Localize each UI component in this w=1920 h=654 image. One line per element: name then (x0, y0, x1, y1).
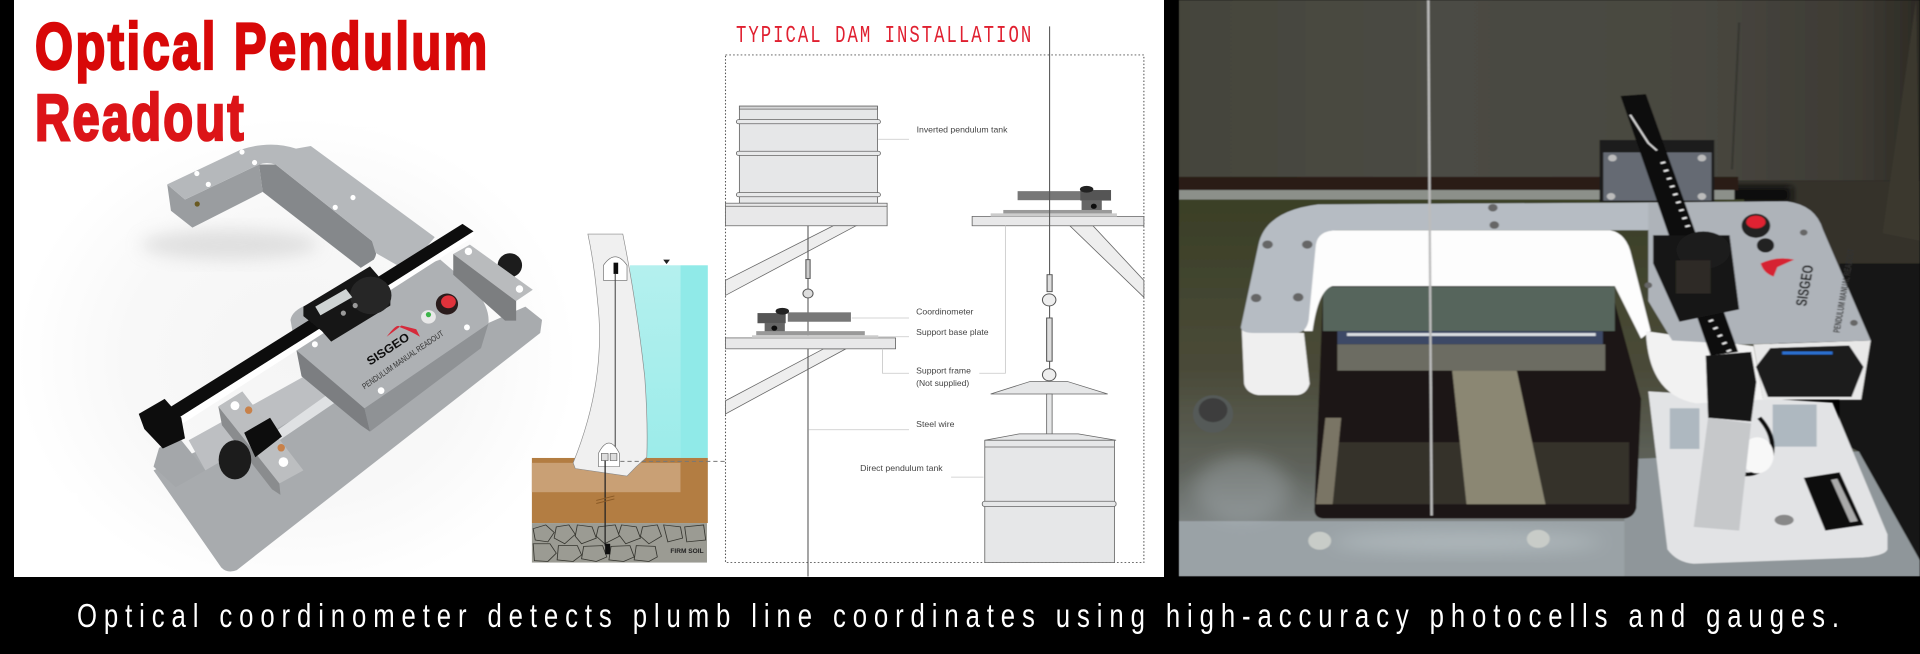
diagram labels: Support base plate (916, 327, 989, 337)
water reservoir (630, 260, 708, 458)
panel: dam cross-section (532, 234, 725, 563)
left knob block (218, 391, 303, 495)
product label plate (1804, 472, 1864, 531)
ground layers (532, 458, 708, 563)
concrete wall (1179, 0, 1920, 181)
lower gallery with readout (596, 443, 619, 554)
diagram labels: Coordinometer (916, 307, 973, 316)
button: black (1757, 238, 1774, 252)
diagram labels: Support frame (916, 366, 971, 375)
struts and lower platform (726, 216, 1144, 414)
graduated rail (1621, 94, 1738, 356)
back rail block (1600, 140, 1714, 202)
title (35, 10, 487, 155)
housing logo (361, 325, 445, 391)
USB panel (1756, 345, 1864, 397)
housing logo: PENDULUM MANUAL READOUT (361, 329, 445, 391)
title: Optical Pendulum (35, 10, 487, 84)
left wire and clamp (803, 226, 813, 576)
rail foot (1694, 352, 1756, 531)
upper gallery with anchor (603, 257, 627, 452)
indicator: green (421, 310, 436, 324)
ledge (1179, 177, 1738, 200)
floor opening (1314, 285, 1641, 519)
housing logo: SISGEO (1793, 264, 1817, 307)
right wire and turnbuckle (1042, 26, 1056, 381)
button: red (436, 294, 458, 315)
rail (139, 224, 474, 487)
housing logo (1761, 248, 1857, 333)
panel: site photo of the installed readout (1179, 0, 1920, 576)
diagram labels: (Not supplied) (916, 379, 969, 388)
title: Readout (35, 81, 244, 155)
diagram labels: Direct pendulum tank (860, 464, 943, 473)
base plate (154, 307, 542, 571)
inverted pendulum tank (726, 106, 887, 226)
panel: product render of the readout (136, 144, 542, 572)
diagram labels (860, 125, 1008, 473)
direct pendulum tank (982, 382, 1116, 563)
diagram labels: Inverted pendulum tank (917, 125, 1008, 134)
right coordinometer (991, 186, 1117, 216)
white U-shaped arm (1241, 202, 1653, 395)
diagram labels: Steel wire (916, 420, 955, 429)
digital display (1653, 231, 1739, 322)
panel: white product and diagram area (14, 0, 1164, 577)
housing logo: PENDULUM MANUAL READOUT (1831, 248, 1857, 333)
steel wire (1428, 0, 1432, 516)
housing logo: SISGEO (364, 330, 412, 368)
button: red (1742, 214, 1770, 238)
floor plate (1179, 199, 1920, 576)
rods and sliding carriage (188, 377, 334, 470)
caption: Optical coordinometer detects plumb line coordinates using high-accuracy photocells and gauges. (77, 598, 1839, 635)
housing body (1644, 201, 1871, 403)
ground layers: FIRM SOIL (670, 548, 704, 555)
right knob block (453, 245, 533, 321)
base foot (1648, 391, 1887, 564)
dam wall (573, 234, 647, 476)
panel: installation diagram (726, 26, 1144, 576)
leader lines (809, 139, 1005, 477)
heading: typical dam installation: TYPICAL DAM INSTALLATION (736, 24, 1031, 50)
main housing (290, 260, 489, 432)
digital display (303, 266, 391, 342)
U-shaped arm (167, 145, 435, 271)
left coordinometer (752, 308, 878, 338)
